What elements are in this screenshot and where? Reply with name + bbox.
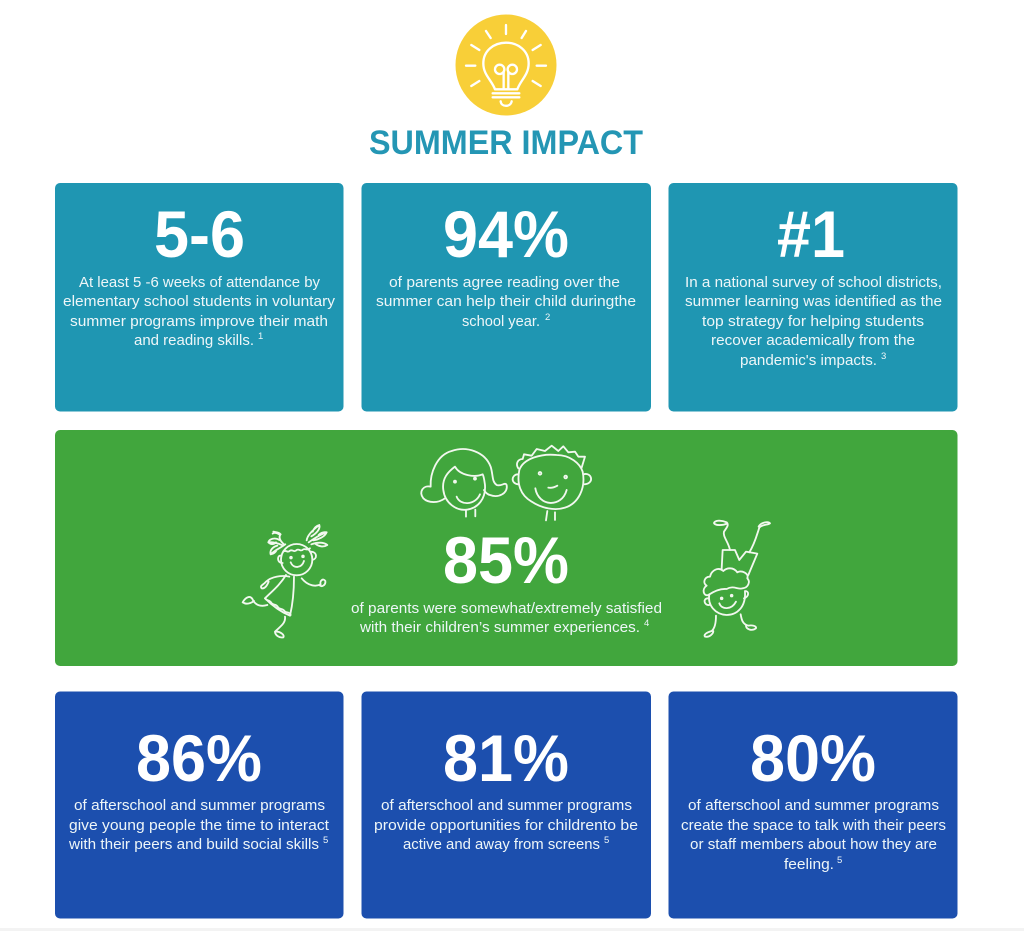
description: feelings: of afterschool and summer programs: [688, 797, 939, 814]
description: feelings: 5: [837, 855, 842, 866]
description: national survey: top strategy for helping students: [702, 313, 924, 330]
description: reading: of parents agree reading over the: [389, 274, 620, 291]
panel: 81% active away from screens: [362, 692, 651, 918]
icon: light bulb badge: [456, 14, 556, 116]
description: satisfaction: 4: [644, 618, 649, 629]
icon: dancing girl: [243, 525, 327, 637]
description: active: [374, 797, 638, 853]
description: active: active and away from screens: [403, 836, 600, 853]
description: attendance: [63, 274, 336, 349]
description: national survey: [685, 274, 942, 369]
statistic: 86%: 86%: [136, 721, 262, 795]
description: satisfaction: [351, 600, 662, 636]
title: SUMMER IMPACT: [369, 124, 643, 162]
description: social skills: 5: [323, 835, 328, 846]
description: satisfaction: with their children’s summer experiences.: [359, 619, 640, 636]
panel: 85% of parents satisfied: [55, 430, 958, 666]
description: active: 5: [604, 835, 609, 846]
description: national survey: 3: [881, 351, 886, 362]
description: feelings: feeling.: [784, 856, 834, 873]
description: attendance: At least 5 -6 weeks of attendance by: [79, 274, 320, 291]
description: active: provide opportunities for childrento be: [374, 817, 638, 834]
description: feelings: or staff members about how they are: [690, 836, 937, 853]
description: feelings: [681, 797, 946, 873]
statistic: 94%: 94%: [443, 197, 569, 271]
description: social skills: [68, 797, 330, 853]
description: social skills: with their peers and build social skills: [68, 836, 319, 853]
description: reading: [376, 274, 636, 330]
description: attendance: summer programs improve their math: [70, 313, 328, 330]
description: attendance: and reading skills.: [134, 332, 254, 349]
description: reading: school year.: [462, 313, 540, 330]
icon: boy face: [513, 446, 591, 520]
description: reading: 2: [545, 312, 550, 323]
icon: child doing a handstand: [704, 521, 770, 637]
description: active: of afterschool and summer programs: [381, 797, 632, 814]
statistic: 80%: 80%: [750, 721, 876, 795]
statistic: 81%: 81%: [443, 721, 569, 795]
description: satisfaction: of parents were somewhat/extremely satisfied: [351, 600, 662, 617]
statistic: 5-6: 5-6: [154, 197, 245, 271]
description: attendance: elementary school students in voluntary: [63, 293, 336, 310]
statistic: #1: #1: [777, 197, 845, 271]
description: national survey: In a national survey of school districts,: [685, 274, 942, 291]
panel: #1 summer learning strategy: [668, 183, 958, 412]
description: attendance: 1: [258, 331, 263, 342]
description: reading: summer can help their child duringthe: [376, 293, 636, 310]
panel: 5-6 weeks of attendance: [55, 183, 344, 412]
statistic: 85%: 85%: [443, 523, 569, 597]
description: social skills: of afterschool and summer programs: [74, 797, 325, 814]
panel: 86% social skills: [55, 692, 344, 918]
panel: 94% of parents: [362, 183, 651, 412]
icon: girl face: [421, 449, 507, 517]
description: feelings: create the space to talk with their peers: [681, 817, 946, 834]
description: social skills: give young people the time to interact: [69, 817, 330, 834]
description: national survey: pandemic's impacts.: [740, 352, 877, 369]
panel: 80% space to talk: [668, 692, 958, 918]
description: national survey: summer learning was identified as the: [685, 293, 942, 310]
description: national survey: recover academically from the: [711, 332, 915, 349]
